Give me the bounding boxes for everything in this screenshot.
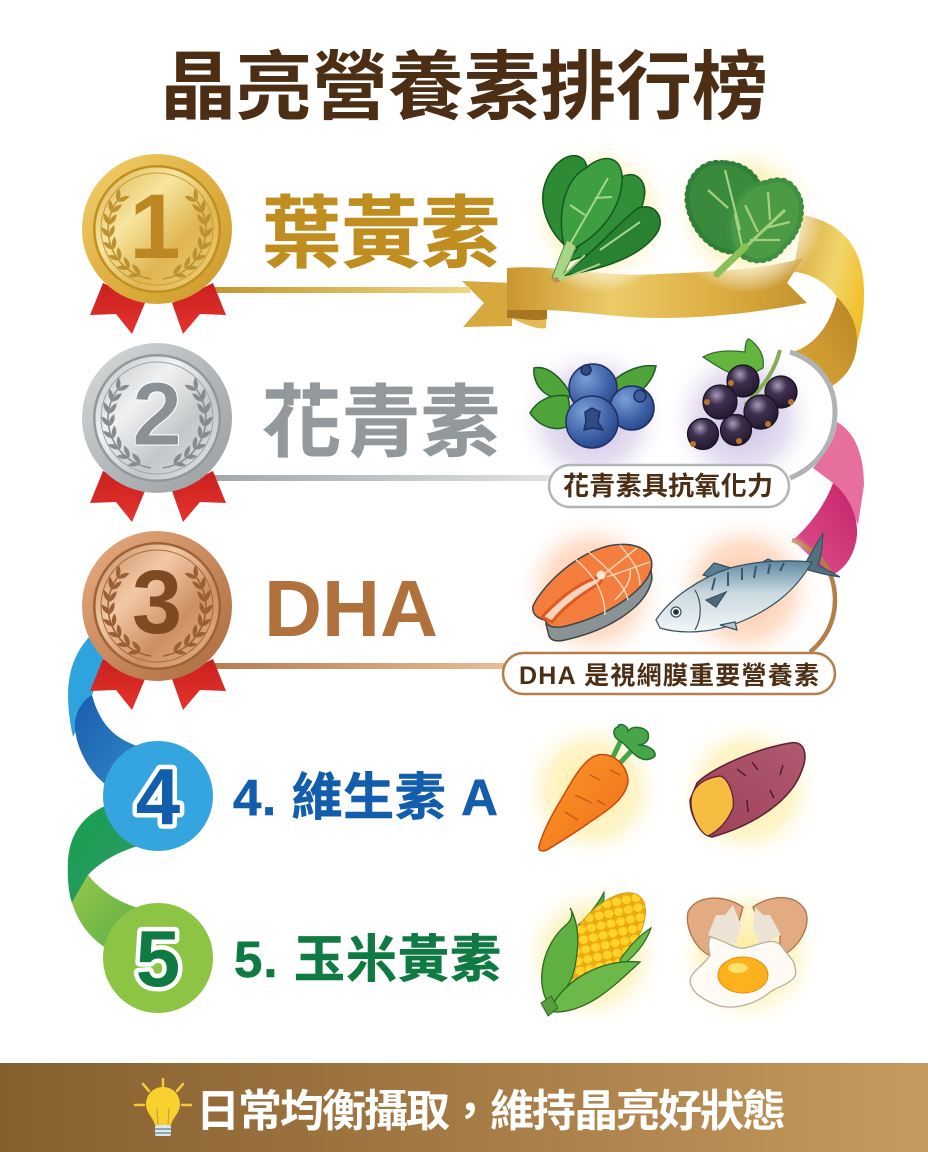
label: vitamin A: 4. 維生素 A — [233, 769, 498, 826]
icon: blueberries — [530, 364, 656, 448]
rank 5 badge: 5 — [136, 914, 180, 1003]
label: DHA: DHA — [264, 564, 438, 653]
medal 1: gold: 1 — [129, 176, 181, 278]
icon: mackerel — [656, 533, 840, 632]
label: lutein: 葉黃素 — [262, 189, 500, 278]
icon: carrot — [539, 724, 655, 851]
icon: blackcurrants — [688, 339, 797, 450]
icon: kale — [689, 165, 799, 274]
medal 2: silver — [82, 343, 232, 522]
icon: spinach — [543, 156, 660, 283]
label: anthocyanin: 花青素 — [262, 378, 500, 467]
glow: berries — [514, 340, 820, 496]
callout: DHA note — [503, 653, 835, 694]
connector line: silver — [212, 475, 552, 481]
callout: anthocyanin note — [549, 465, 789, 507]
ribbon: blue wave to rank 4 — [68, 634, 137, 784]
ribbon: green wave to rank 5 — [68, 806, 138, 948]
glow: leafy greens — [522, 137, 824, 293]
medal 1: gold — [82, 154, 232, 334]
medal 2: silver: 2 — [132, 365, 182, 465]
callout: DHA note: DHA 是視網膜重要營養素 — [519, 662, 819, 690]
footer message: 日常均衡攝取，維持晶亮好狀態 — [196, 1087, 786, 1136]
callout: anthocyanin note: 花青素具抗氧化力 — [563, 471, 773, 501]
ribbon: bronze connector arc — [792, 540, 835, 652]
rank 4 badge: 4 — [136, 752, 181, 841]
ribbon: pink wave — [793, 422, 864, 576]
ribbon: silver connector arc — [790, 352, 835, 478]
title: 晶亮營養素排行榜 — [160, 45, 768, 129]
icon: salmon steak — [533, 544, 652, 641]
icon: corn — [541, 878, 661, 1016]
medal 3: bronze: 3 — [132, 553, 182, 653]
ribbon: gold wave and connector to rank 2 — [462, 215, 864, 386]
icon: light bulb — [135, 1079, 191, 1136]
glow: fish — [514, 512, 823, 668]
connector line: gold — [212, 287, 470, 293]
label: zeaxanthin: 5. 玉米黃素 — [234, 931, 501, 988]
glow: carrot and sweet potato — [516, 714, 824, 866]
connector line: bronze — [212, 663, 506, 669]
icon: cracked egg — [687, 898, 807, 1007]
icon: sweet potato — [690, 743, 805, 837]
rank 4 badge — [103, 741, 213, 851]
glow: corn and egg — [516, 879, 824, 1031]
footer banner — [0, 1063, 928, 1152]
rank 5 badge — [103, 903, 213, 1013]
medal 3: bronze — [82, 531, 232, 710]
